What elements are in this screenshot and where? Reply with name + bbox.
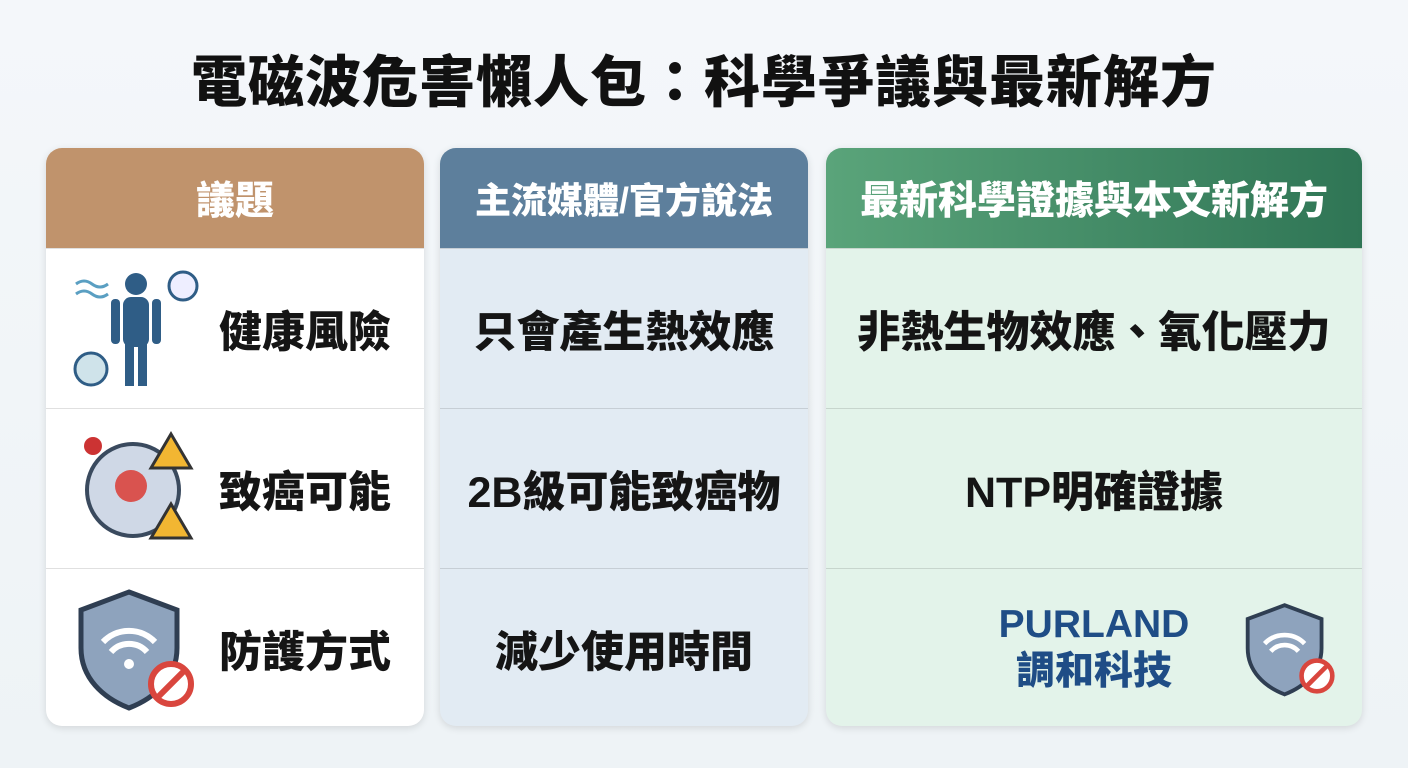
panel: mainstream <box>440 148 808 726</box>
row: thermal: 只會產生熱效應 <box>474 308 774 356</box>
row: reduce time <box>440 568 808 728</box>
row: thermal <box>440 248 808 408</box>
row: NTP <box>826 408 1362 568</box>
row: reduce time: 減少使用時間 <box>495 628 753 676</box>
icon: shield small <box>1246 603 1335 696</box>
title: 電磁波危害懶人包：科學爭議與最新解方 <box>191 51 1217 114</box>
row: cancer <box>46 408 424 568</box>
row: 2B: 2B級可能致癌物 <box>468 468 780 516</box>
row: health risk <box>46 248 424 408</box>
row: non-thermal: 非熱生物效應、氧化壓力 <box>858 308 1330 356</box>
header: mainstream <box>440 148 808 248</box>
icon: human body <box>74 270 198 386</box>
row: non-thermal <box>826 248 1362 408</box>
row: PURLAND: 調和科技 <box>1016 650 1172 692</box>
icon: shield <box>78 589 194 711</box>
panel: new evidence <box>826 148 1362 726</box>
header: issues <box>46 148 424 248</box>
header: new evidence <box>826 148 1362 248</box>
header: issues: 議題 <box>196 180 274 223</box>
header: mainstream: 主流媒體/官方說法 <box>475 180 773 221</box>
row: PURLAND: PURLAND <box>999 603 1189 646</box>
row: PURLAND <box>826 568 1362 728</box>
row: health risk: 健康風險 <box>219 308 391 356</box>
panel: issues <box>46 148 424 726</box>
row: protection: 防護方式 <box>219 628 391 676</box>
header: new evidence: 最新科學證據與本文新解方 <box>860 180 1328 223</box>
icon: cell warning <box>84 431 194 540</box>
row: protection <box>46 568 424 728</box>
row: cancer: 致癌可能 <box>219 468 391 516</box>
row: 2B <box>440 408 808 568</box>
row: NTP: NTP明確證據 <box>965 468 1223 516</box>
